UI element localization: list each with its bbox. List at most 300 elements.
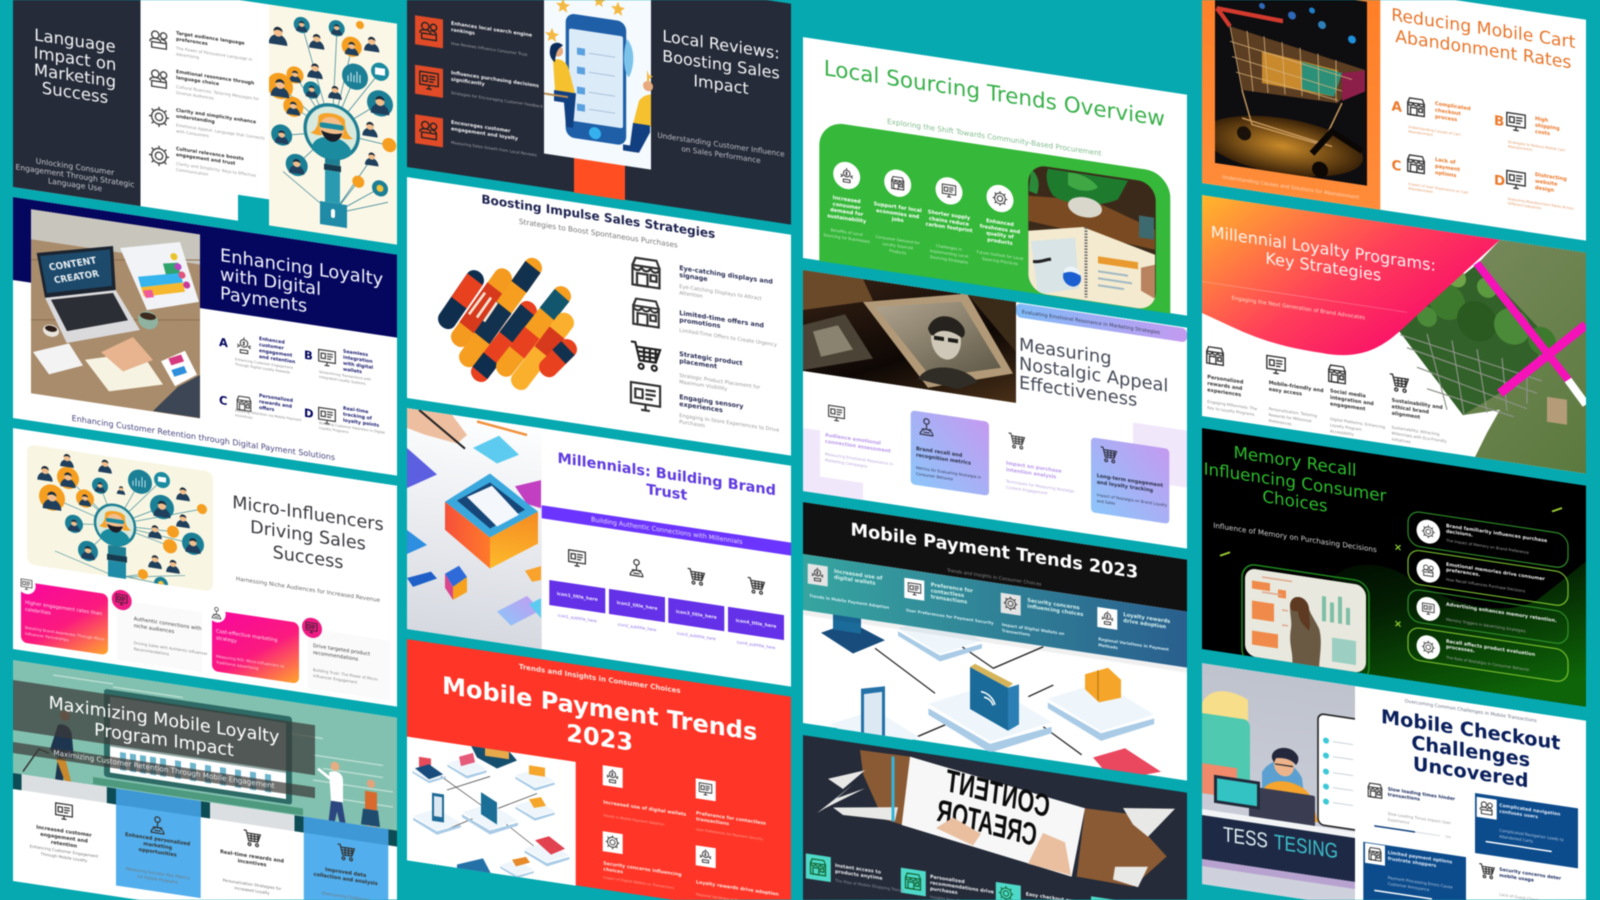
trend headings: contactless xyxy=(931,588,964,599)
icon: people on orange xyxy=(415,15,443,48)
title: Effectiveness xyxy=(1019,372,1137,411)
strategy headings: ethical brand xyxy=(1392,404,1429,416)
column tabs xyxy=(13,773,397,847)
panel: dark title column xyxy=(13,0,140,206)
point subtitles: Through Digital Loyalty Rewards xyxy=(234,362,290,375)
strategy subtitles: Sustainability: Attracting xyxy=(1392,424,1440,437)
point headings: Cultural relevance boosts xyxy=(176,146,244,162)
cause headings: Lack of xyxy=(1435,157,1456,166)
column headings: demand for xyxy=(830,207,864,218)
dark green wave xyxy=(1332,524,1586,707)
four challenge cards xyxy=(1363,776,1578,900)
lilac headings: connection assessment xyxy=(825,439,891,455)
cause headings: Complicated xyxy=(1435,101,1471,112)
point headings: Encourages customer xyxy=(451,120,511,135)
column subtitles: Implementing Local xyxy=(930,248,968,259)
icon: piggy wallet xyxy=(603,765,623,788)
box subtitles: icon2_subtitle_here xyxy=(618,622,657,632)
column subtitles: Enhancing Customer Engagement xyxy=(30,844,99,859)
subtitle: Understanding Customer Influence xyxy=(657,131,785,159)
column 2 blue panel xyxy=(116,788,201,898)
box xyxy=(445,467,538,545)
point headings: engagement and trust xyxy=(176,152,236,167)
slide: Boosting Impulse Sales Strategies xyxy=(407,177,791,456)
icon circle: gears xyxy=(1416,634,1440,661)
strategy subtitles: Limited-Time Offers to Create Urgency xyxy=(679,328,777,348)
icon: cloud xyxy=(1001,593,1021,616)
icon: store xyxy=(1408,98,1424,117)
card: cost-effective: Cost-effective marketing xyxy=(216,628,278,644)
card: cost-effective: Traditional Advertising xyxy=(215,659,259,671)
title: Memory Recall xyxy=(1234,442,1356,480)
column headings: opportunities xyxy=(139,847,177,859)
slide: Mobile Checkout Challenges Uncovered xyxy=(1202,663,1586,900)
subtitle: Language Use xyxy=(48,176,102,193)
image: influencer network xyxy=(267,4,397,245)
trend headings: Preference for xyxy=(931,582,973,595)
dark headings: and loyalty tracking xyxy=(1097,480,1153,494)
cause headings: checkout xyxy=(1435,107,1461,117)
dark headings: Slow loading times hinder xyxy=(1388,786,1456,803)
card: higher engagement: Boosting Brand Awareness Through Micro- xyxy=(25,625,106,642)
icon: coin xyxy=(1097,607,1117,630)
column subtitles: Through Mobile Loyalty xyxy=(40,851,88,863)
trend subtitles: Trends in Mobile Payment Adoption xyxy=(809,593,889,610)
column headings: Support for local xyxy=(874,201,922,214)
icon: monitor xyxy=(1507,112,1525,132)
column subtitles: Sourcing Strategies xyxy=(930,254,968,265)
card headings: decisions. xyxy=(1446,529,1473,539)
icon: people xyxy=(150,69,167,88)
decorative dashes xyxy=(1220,457,1562,607)
cause headings: High xyxy=(1535,116,1549,124)
decorative teal block xyxy=(238,195,269,226)
strategy headings: promotions xyxy=(679,316,721,330)
strategy subtitles: Maximum Visibility xyxy=(679,379,727,393)
column headings: Increased customer xyxy=(36,825,92,839)
column headings: Increased xyxy=(833,195,861,205)
progress fill navy xyxy=(1374,826,1415,832)
subtitle: Engagement Through Strategic xyxy=(16,162,134,189)
card subtitles: The Impact of Memory on Brand Preference xyxy=(1445,537,1529,555)
icon: shopping bag xyxy=(1329,365,1345,384)
strategy headings: Strategic product xyxy=(679,350,743,367)
icon: people xyxy=(150,30,167,49)
desk lettering: TESS TESING xyxy=(1223,823,1338,863)
subtitle: Harnessing Niche Audiences for Increased Revenue xyxy=(236,576,381,604)
icon: store xyxy=(1207,346,1223,365)
trend subtitles: User Preferences for Payment Security xyxy=(906,607,994,626)
strategy headings: Sustainability and xyxy=(1392,397,1443,411)
point subtitles: Boosting Customer Retention in Digital xyxy=(319,421,385,435)
strategy headings: alignment xyxy=(1392,410,1421,421)
card background xyxy=(1091,437,1169,524)
title: Success xyxy=(273,543,343,574)
cause subtitles: Different Industries xyxy=(1508,201,1541,210)
strategy subtitles: Loyalty Program xyxy=(1330,422,1362,432)
card: drive targeted: Influencer Engagement xyxy=(313,673,358,685)
icon circle: gears xyxy=(1416,518,1440,545)
title: Impact xyxy=(693,71,749,98)
image: notebook and plant xyxy=(1028,164,1156,318)
point subtitles: Integrated Loyalty Systems xyxy=(319,375,366,386)
navy header band xyxy=(13,197,397,338)
lilac subtitles: Techniques for Measuring Nostalgic xyxy=(1005,478,1075,494)
progress tracks xyxy=(1374,826,1440,836)
magenta cross stripes xyxy=(1477,263,1586,406)
dark headings: mobile usage xyxy=(1499,873,1534,884)
person: man with glasses xyxy=(1260,778,1318,822)
card: drive targeted: recommendations xyxy=(313,650,359,663)
point headings: Clarity and simplicity enhance xyxy=(176,107,256,125)
light subtitles: Payment Processing Errors Cause xyxy=(1388,875,1453,890)
point headings: transactions xyxy=(696,816,729,827)
strategy headings: experiences xyxy=(679,400,723,414)
icon: shop monitor xyxy=(633,298,659,328)
title: Mobile Payment Trends xyxy=(442,671,757,747)
title: Micro-Influencers xyxy=(232,493,384,536)
point subtitles: Enhancing Customer Engagement xyxy=(235,357,294,370)
icon: monitor on orange xyxy=(415,65,443,98)
box titles: icon3_title_here xyxy=(676,609,717,621)
slide: Local Sourcing Trends Overview xyxy=(803,37,1187,356)
point headings: preferences xyxy=(176,36,208,47)
card: authentic connections: Authentic connections with xyxy=(134,616,202,632)
title: Boosting Sales xyxy=(662,46,780,83)
strategy headings: Eye-catching displays and xyxy=(679,264,773,286)
column headings: jobs xyxy=(891,216,904,224)
point headings: customer xyxy=(259,342,284,352)
icon: coin xyxy=(237,336,251,354)
icon: cart xyxy=(1390,374,1408,393)
hand with pen xyxy=(407,408,467,445)
column headings: Shorter supply xyxy=(928,209,971,222)
point headings: rewards and xyxy=(259,399,292,410)
mirrored sign text: CREATOR xyxy=(935,792,1039,853)
cause headings: payment xyxy=(1435,163,1461,173)
point headings: offers xyxy=(259,405,275,413)
box subtitles: icon4_subtitle_here xyxy=(737,639,776,650)
cause subtitles: Impact of User Experience on Cart xyxy=(1408,182,1469,195)
point headings: choices xyxy=(603,866,623,875)
icon: contactless xyxy=(904,578,924,601)
icon: store xyxy=(1368,783,1382,798)
trend headings: transactions xyxy=(931,594,967,606)
person: woman xyxy=(553,58,575,93)
card headings: preferences. xyxy=(1446,567,1480,578)
card: drive targeted xyxy=(301,617,379,684)
title: Impact on xyxy=(34,43,116,74)
progress fill white xyxy=(1374,825,1552,900)
point subtitles: Emotional Appeal: Language that Connects xyxy=(176,122,265,141)
icon: loyalty coin xyxy=(696,845,716,868)
four trend points xyxy=(602,764,779,900)
icon: cart xyxy=(338,844,354,861)
slide: Enhancing Loyalty with Digital Payments xyxy=(13,197,397,476)
white stripes on artwork xyxy=(469,290,497,324)
image: man at desk with phone xyxy=(1202,663,1363,900)
icon: cart with arrows xyxy=(631,341,660,372)
icon: cart xyxy=(244,830,260,847)
person: businesswoman xyxy=(365,791,377,811)
column 3 header xyxy=(210,803,294,831)
image: cart full of plants xyxy=(1397,224,1586,474)
image: desk with laptop xyxy=(31,209,200,419)
icon: gear head xyxy=(149,105,169,128)
cause headings: costs xyxy=(1535,129,1550,137)
cause headings: process xyxy=(1435,114,1457,123)
point subtitles: Trends in Mobile Payment Adoption xyxy=(602,813,664,827)
trend subtitles: Impact of Digital Wallets on xyxy=(1002,622,1065,636)
cause subtitles: Abandonment xyxy=(1408,186,1433,194)
image: phone with star reviews xyxy=(544,0,653,170)
icon: gear xyxy=(149,144,169,167)
person: man xyxy=(633,92,651,127)
band shadow xyxy=(803,610,1187,673)
white stripe xyxy=(1568,380,1586,405)
point headings: Loyalty rewards drive adoption xyxy=(696,879,779,898)
strategy subtitles: Millennials with Eco-Friendly xyxy=(1392,430,1447,444)
teal gradient trends band xyxy=(803,554,1187,668)
column subtitles: Measuring Success: Key Metrics xyxy=(126,866,190,880)
card subtitles: The Role of Nostalgia in Consumer Behavior xyxy=(1445,654,1530,672)
point subtitles: Boosting Retention via Mobile Payment xyxy=(235,408,302,422)
point headings: tracking of xyxy=(343,412,373,422)
card headings: Recall affects product evaluation xyxy=(1446,639,1536,658)
subtitle band xyxy=(542,505,792,556)
card: cost-effective: strategy xyxy=(216,635,237,645)
person: runner xyxy=(50,723,74,783)
title: Abandonment Rates xyxy=(1395,27,1571,73)
column subtitles: Locally Sourced xyxy=(882,241,913,251)
point subtitles: Impact of Digital Wallets on Transactions xyxy=(603,875,674,890)
icon: gears xyxy=(996,882,1021,900)
dark headings: Long-term engagement xyxy=(1097,473,1164,489)
feature headings: products anytime xyxy=(835,869,883,882)
icon: people on orange xyxy=(415,114,443,147)
card: cost-effective: Measuring ROI: Micro-Influencers vs xyxy=(216,653,284,669)
icon: monitor xyxy=(569,550,585,567)
column headings: collection and analysis xyxy=(314,872,378,887)
icon: cart xyxy=(1479,864,1494,879)
column headings: incentives xyxy=(238,858,266,869)
progress values: 70% xyxy=(1445,834,1452,839)
cause headings: design xyxy=(1535,185,1554,194)
trend headings: influencing choices xyxy=(1027,604,1083,618)
point headings: Personalized xyxy=(259,393,293,404)
image: vintage photographs xyxy=(803,269,1016,403)
image: influencer network xyxy=(27,444,213,599)
cause subtitles: Understanding Causes of Cart xyxy=(1408,125,1461,137)
dark headings: Security concerns deter xyxy=(1499,867,1562,882)
title: Driving Sales xyxy=(250,518,366,555)
slide: Mobile Payment Trends 2023 red xyxy=(407,639,791,900)
causes grid xyxy=(1392,94,1574,215)
column 1 header xyxy=(22,774,107,803)
four icon cards xyxy=(549,547,784,652)
strategy headings: engagement xyxy=(1330,401,1366,413)
title: Key Strategies xyxy=(1265,249,1381,285)
point headings: loyalty points xyxy=(343,418,379,429)
laptop text: CONTENT xyxy=(48,255,99,274)
lilac headings: Impact on purchase xyxy=(1006,460,1062,475)
point subtitles: Advertising xyxy=(176,51,200,60)
feature headings: Instant access to xyxy=(835,863,882,876)
point subtitles: Diverse Audiences xyxy=(176,90,214,101)
column subtitles: for Mobile Programs xyxy=(138,874,178,885)
strategy headings: Social media xyxy=(1330,388,1366,400)
point subtitles: Clarity and Simplicity: Keys to Effective xyxy=(176,161,257,178)
icon: wallet xyxy=(319,349,335,367)
point subtitles: Loyalty Programs xyxy=(319,426,349,434)
four metric cards xyxy=(825,397,1169,524)
point headings: Influences purchasing decisions xyxy=(451,70,539,89)
footer subtitle: Enhancing Customer Retention through Digital Payment Solutions xyxy=(72,414,335,462)
slide: Millennial Loyalty Programs Key Strategies xyxy=(1202,195,1586,474)
title: Success xyxy=(42,78,108,107)
box subtitles: icon3_subtitle_here xyxy=(677,631,716,641)
column headings: retention xyxy=(51,840,78,850)
slide: Millennials Building Brand Trust xyxy=(407,408,792,687)
point headings: Security concerns influencing xyxy=(603,860,682,878)
title: Boosting Impulse Sales Strategies xyxy=(481,192,715,241)
column headings: Enhanced personalized xyxy=(125,832,191,848)
column headings: chains reduce xyxy=(929,216,969,228)
icon: receipt xyxy=(237,396,251,411)
point headings: Preference for contactless xyxy=(696,810,766,827)
letter C: C xyxy=(219,393,227,408)
title: Mobile Payment Trends 2023 xyxy=(850,519,1138,583)
strategy subtitles: Purchases xyxy=(679,419,705,429)
letters: A xyxy=(1392,98,1402,116)
icon: promo monitor xyxy=(631,382,660,413)
icon: piggy xyxy=(808,564,828,587)
strategy headings: integration and xyxy=(1330,395,1374,407)
title: Trust xyxy=(646,482,687,504)
icon: monitor xyxy=(319,407,335,425)
trend columns xyxy=(808,563,1170,658)
green panel xyxy=(819,120,1170,353)
point headings: integration xyxy=(343,355,373,365)
icon: pin xyxy=(630,559,643,577)
image: torn reverse content creator sign xyxy=(817,743,1175,893)
point headings: understanding xyxy=(176,113,215,125)
point headings: Target audience language xyxy=(176,30,245,47)
strategy subtitles: Strategic Product Placement for xyxy=(679,373,761,391)
card: higher engagement: celebrities xyxy=(25,607,51,617)
column subtitles: Sourcing Practices xyxy=(982,256,1018,266)
column subtitles: Personalization Strategies for xyxy=(223,877,282,891)
slide: Local Reviews Boosting Sales Impact xyxy=(407,0,791,229)
title: Millennial Loyalty Programs: xyxy=(1211,222,1436,275)
point headings: language choice xyxy=(176,75,219,87)
cause subtitles: Abandonment xyxy=(1408,129,1433,137)
image: woman at data wall xyxy=(1245,567,1366,678)
image: flat illustration background xyxy=(13,660,397,850)
image: shopping cart at night xyxy=(1203,0,1367,187)
navy cards xyxy=(1363,776,1578,900)
list of four points xyxy=(149,26,265,185)
dark subtitles: Metrics for Evaluating Nostalgia in xyxy=(916,465,982,480)
column 4 blue panel xyxy=(304,817,388,900)
card: authentic connections xyxy=(110,589,208,656)
subtitle: Strategies to Boost Spontaneous Purchases xyxy=(519,217,678,250)
strategy subtitles: Accessibility xyxy=(1330,428,1355,437)
dark subtitle overlay xyxy=(13,742,315,798)
title: Influencing Consumer xyxy=(1204,458,1386,506)
card outlines bright xyxy=(1408,549,1568,683)
letter D: D xyxy=(304,406,314,421)
divider xyxy=(1202,282,1407,312)
point headings: Real-time xyxy=(343,406,368,415)
strategy headings: placement xyxy=(679,357,717,370)
strategy columns xyxy=(1207,346,1447,451)
point headings: engagement xyxy=(259,348,293,359)
trend headings: Security concerns xyxy=(1027,598,1080,611)
slide: Measuring Nostalgic Appeal Effectiveness xyxy=(803,269,1187,549)
decorative orange stem xyxy=(574,151,625,204)
slide: Maximizing Mobile Loyalty Program Impact xyxy=(13,660,397,900)
icon: monitor xyxy=(1507,170,1525,190)
icon: monitor xyxy=(829,405,844,422)
point headings: Emotional resonance through xyxy=(176,69,254,87)
icon tile xyxy=(1091,896,1116,900)
image: isometric payment network xyxy=(407,736,576,887)
card background xyxy=(911,410,989,496)
icon circle: monitor xyxy=(1416,595,1440,623)
point headings: wallets xyxy=(343,367,362,375)
card headings: processes. xyxy=(1446,644,1475,654)
strategy subtitles: Attention xyxy=(679,290,703,300)
title: Enhancing Loyalty xyxy=(220,245,384,291)
four benefit columns xyxy=(824,159,1023,273)
column headings: Real-time rewards and xyxy=(220,849,284,865)
title: Reducing Mobile Cart xyxy=(1391,5,1576,53)
icon: monitor xyxy=(1267,355,1285,375)
list of review points xyxy=(415,15,544,162)
icon: cart xyxy=(748,577,764,595)
point subtitles: Strategies for Encouraging Customer Feedback xyxy=(451,90,544,109)
point subtitles: Measuring Sales Growth from Local Reviews xyxy=(451,140,537,157)
top pill banner xyxy=(1016,303,1187,343)
title: Mobile Checkout xyxy=(1381,705,1560,755)
slide: Mobile Payment Trends 2023 black xyxy=(803,502,1187,806)
title: Local Sourcing Trends Overview xyxy=(824,56,1165,132)
letters: B xyxy=(1494,113,1504,130)
light headings: Limited payment options xyxy=(1388,850,1452,866)
point subtitles: Streamlining Transactions with xyxy=(319,370,371,382)
lilac subtitles: Marketing Campaigns xyxy=(825,457,867,469)
dark headings: Brand recall and xyxy=(916,446,963,459)
feature subtitles: The Rise of Mobile Shopping Trends xyxy=(834,878,904,893)
title: Marketing xyxy=(34,60,116,91)
card headings: Emotional memories drive consumer xyxy=(1446,562,1545,583)
title: Local Reviews: xyxy=(662,26,780,63)
slide: Reducing Mobile Cart Abandonment Rates xyxy=(1202,0,1586,241)
icon: pin xyxy=(920,418,933,436)
trend subtitles: Regional Variations in Payment xyxy=(1098,636,1169,652)
light subtitles: Customer Annoyance xyxy=(1388,881,1430,892)
point subtitles: The Power of Persuasive Language in xyxy=(175,45,253,62)
title: Nostalgic Appeal xyxy=(1019,353,1168,397)
point headings: significantly xyxy=(451,77,485,88)
dark title overlay xyxy=(13,680,315,775)
image: isometric payment box xyxy=(407,408,542,649)
point headings: rankings xyxy=(451,27,475,37)
strategy subtitles: Engaging Millennials: The xyxy=(1207,399,1258,411)
point headings: with digital xyxy=(343,361,373,371)
strategy headings: Personalized xyxy=(1207,374,1244,386)
